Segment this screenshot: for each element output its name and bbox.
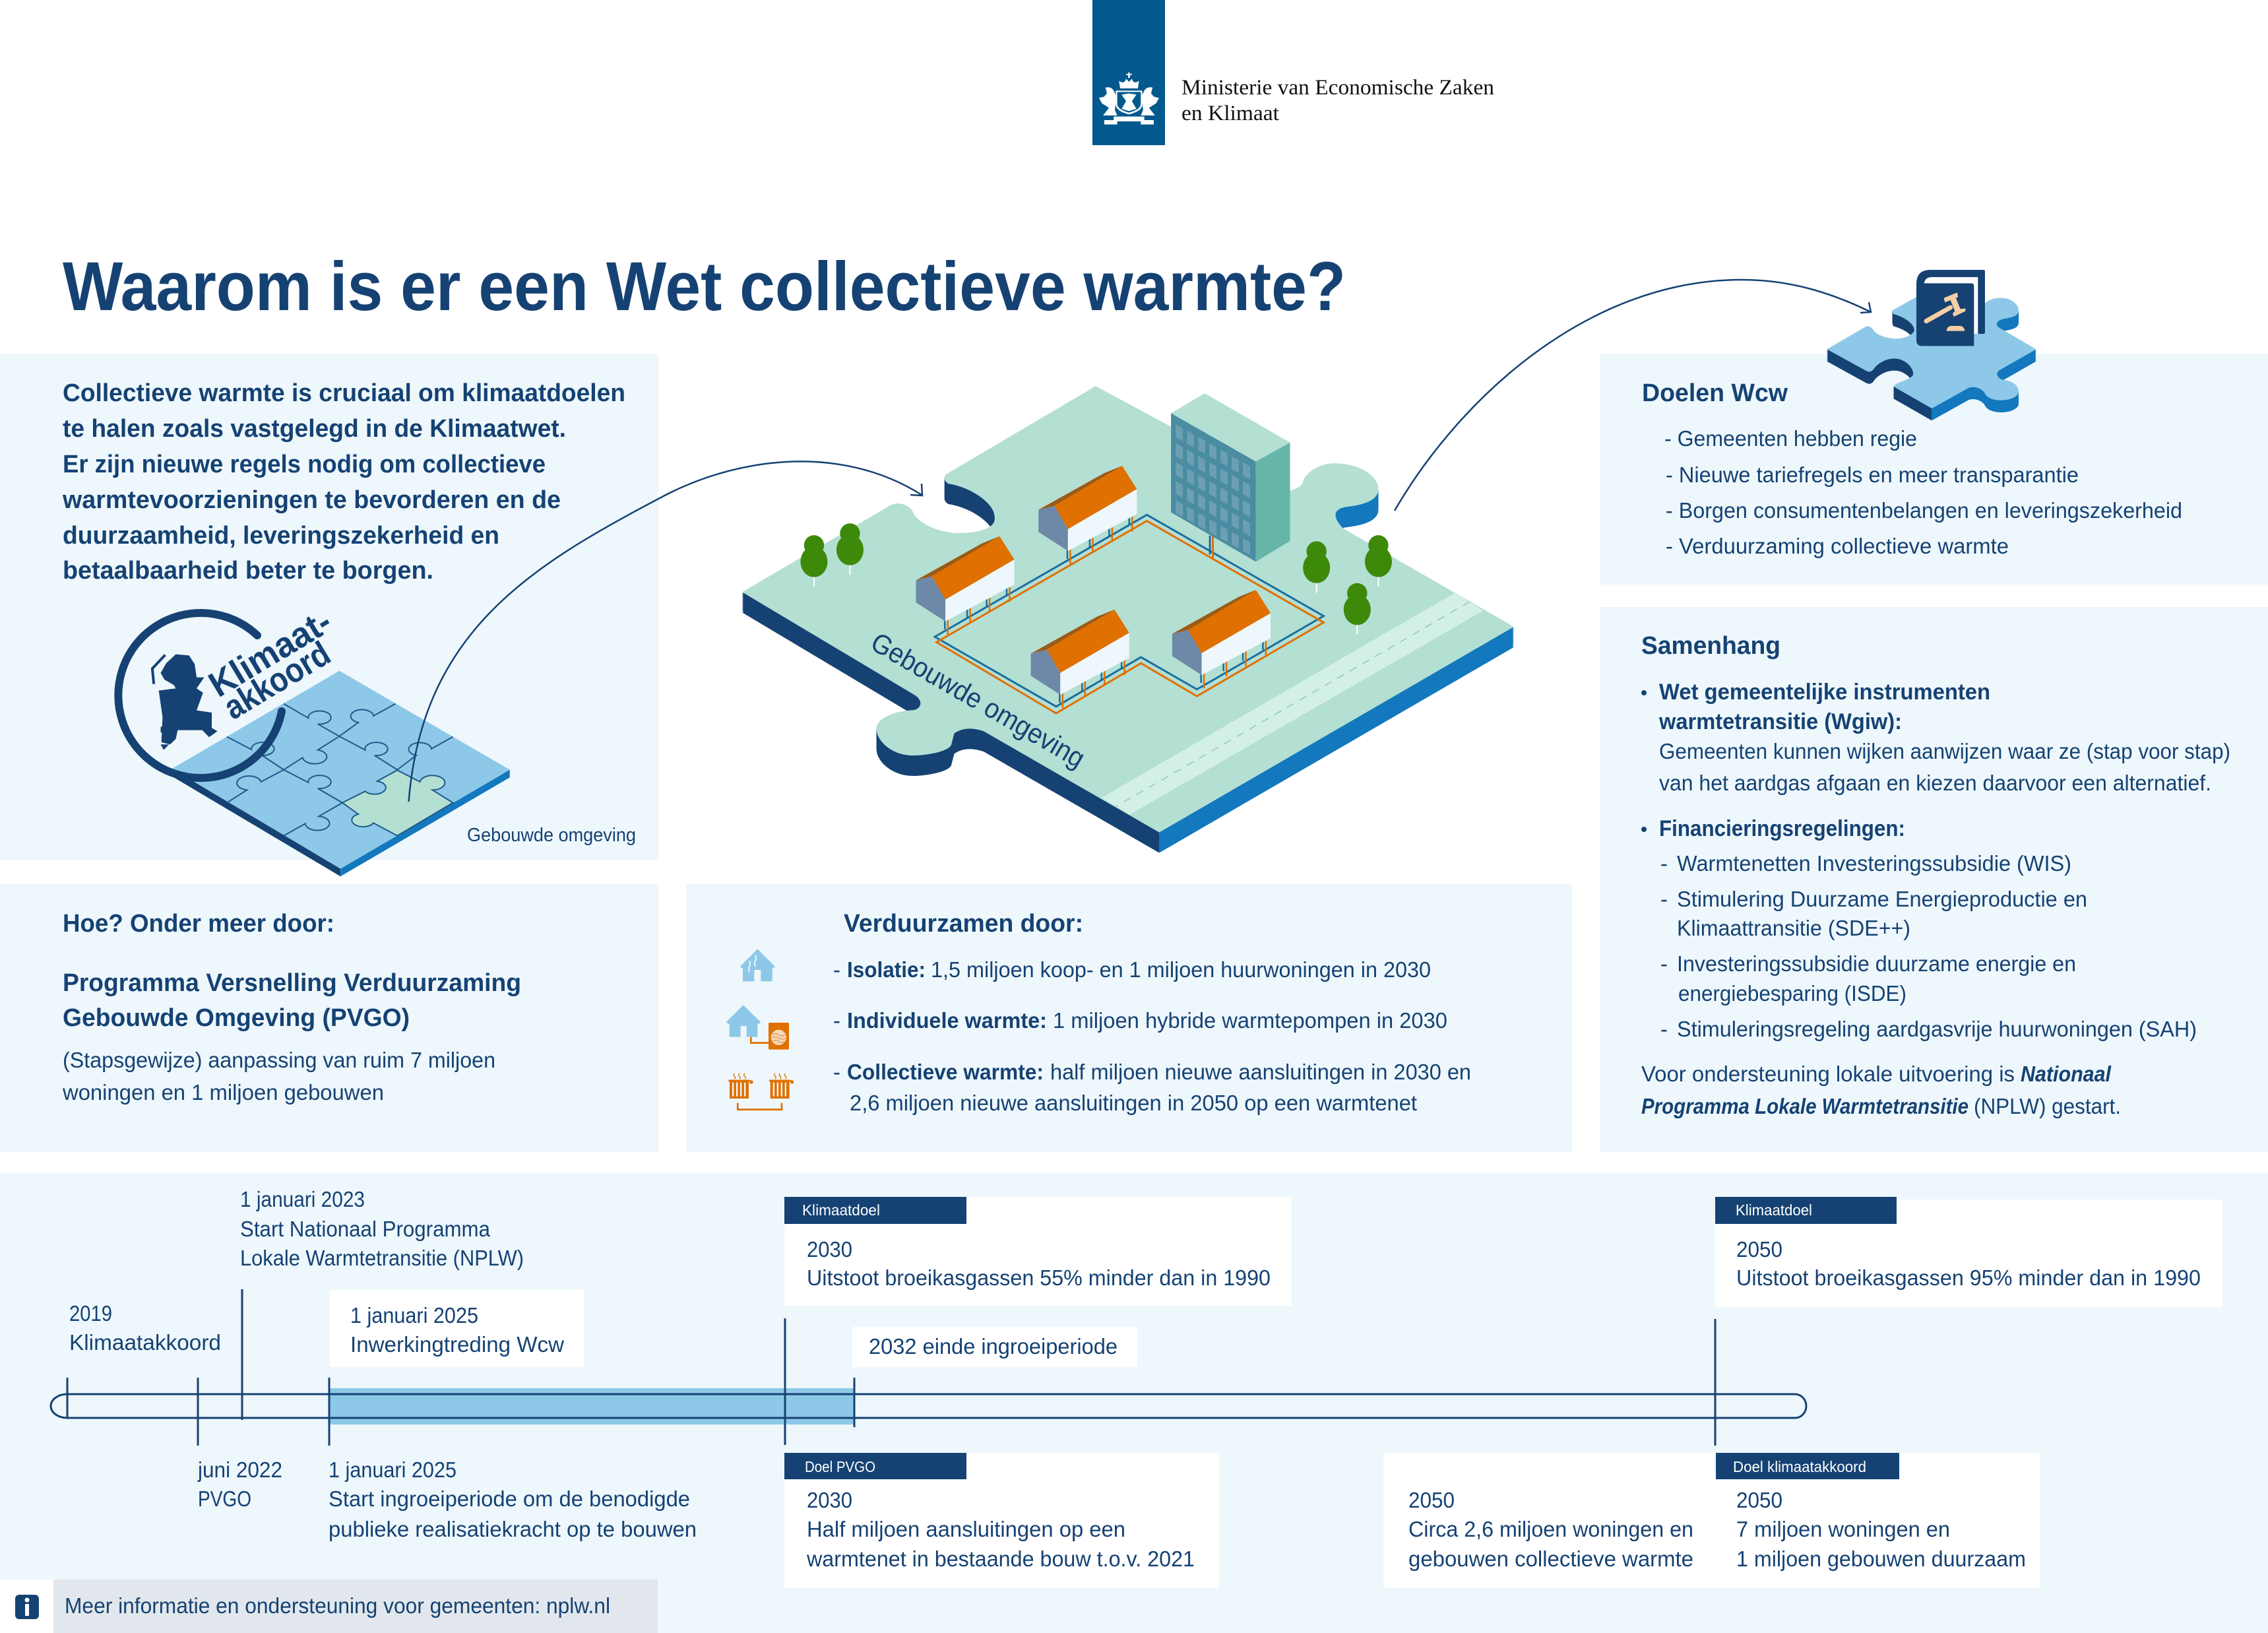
road bbox=[1102, 592, 1483, 815]
bullet: Financieringsregelingen: Financieringsregelingen: bbox=[1659, 816, 1905, 841]
card: Doel PVGO bbox=[784, 1453, 1219, 1588]
icon: coat of arms bbox=[1099, 73, 1159, 125]
panel: Doelen Wcw: - Gemeenten hebben regie bbox=[1664, 426, 1917, 451]
bullet: Financieringsregelingen: Stimulering Duurzame Energieproductie en bbox=[1677, 887, 2087, 911]
milestone: 2025 start ingroeiperiode bbox=[329, 1457, 697, 1541]
label: Gebouwde omgeving (small): Gebouwde omgeving bbox=[467, 825, 636, 846]
bullet: Financieringsregelingen bbox=[1641, 816, 2197, 1041]
intro text block: warmtevoorzieningen te bevorderen en de bbox=[62, 486, 561, 514]
Klimaatakkoord logo: akkoord bbox=[217, 634, 337, 727]
intro text block: Er zijn nieuwe regels nodig om collectieve bbox=[63, 451, 546, 478]
panel: Doelen Wcw: - Verduurzaming collectieve warmte bbox=[1666, 534, 2009, 558]
puzzle thickness bbox=[742, 478, 1514, 852]
bullet: Wgiw bbox=[1641, 680, 2230, 795]
green puzzle piece bbox=[342, 770, 453, 836]
milestone: 2023 NPLW: Start Nationaal Programma bbox=[240, 1217, 491, 1241]
item: Individuele warmte bbox=[833, 1008, 1447, 1033]
puzzle thickness bbox=[1827, 298, 2036, 420]
ministry name: en Klimaat bbox=[1181, 102, 1279, 125]
note: NPLW: Programma Lokale Warmtetransitie bbox=[1641, 1094, 1969, 1118]
card: Doel klimaatakkoord: Circa 2,6 miljoen woningen en bbox=[1408, 1517, 1693, 1541]
ministry name: Ministerie van Economische Zaken bbox=[1181, 76, 1494, 100]
item: Collectieve warmte: - bbox=[833, 1060, 840, 1084]
milestone: 2023 NPLW bbox=[240, 1187, 524, 1270]
note: NPLW: (NPLW) gestart. bbox=[1974, 1094, 2121, 1118]
note: NPLW: Nationaal bbox=[2021, 1062, 2112, 1086]
trees bbox=[800, 523, 1392, 635]
note: NPLW: Voor ondersteuning lokale uitvoering is bbox=[1641, 1062, 2015, 1086]
panel: Samenhang bbox=[1641, 632, 2230, 1118]
Klimaatakkoord logo: Klimaat- bbox=[202, 601, 338, 705]
panel: Verduurzamen door bbox=[726, 910, 1471, 1115]
panel: Samenhang: Samenhang bbox=[1641, 632, 1780, 660]
milestone: juni 2022 PVGO: PVGO bbox=[198, 1487, 251, 1511]
card: Doel klimaatakkoord bbox=[1383, 1453, 2040, 1588]
title: Waarom is er een Wet collectieve warmte? bbox=[63, 248, 1346, 325]
logo: Rijksoverheid ribbon with crest bbox=[1092, 0, 1494, 145]
item: Isolatie: - bbox=[833, 957, 840, 982]
note: NPLW bbox=[1641, 1062, 2121, 1118]
milestone: 2025 Inwerkingtreding: Inwerkingtreding Wcw bbox=[350, 1332, 564, 1357]
panel: Doelen Wcw: - Borgen consumentenbelangen en leveringszekerheid bbox=[1666, 498, 2182, 523]
item: Collectieve warmte: half miljoen nieuwe aansluitingen in 2030 en bbox=[1050, 1060, 1471, 1084]
milestone: 2025 start ingroeiperiode: 1 januari 2025 bbox=[329, 1457, 457, 1482]
milestone: 2025 start ingroeiperiode: Start ingroeiperiode om de benodigde bbox=[329, 1487, 690, 1511]
milestone: 2019 Klimaatakkoord bbox=[69, 1301, 221, 1355]
bullet: Wgiw: Wet gemeentelijke instrumenten bbox=[1659, 680, 1990, 705]
card: Klimaatdoel 2030: Klimaatdoel bbox=[802, 1201, 880, 1219]
houses bbox=[916, 466, 1271, 708]
card: Doel klimaatakkoord: Doel klimaatakkoord bbox=[1733, 1458, 1866, 1475]
item: Collectieve warmte: 2,6 miljoen nieuwe aansluitingen in 2050 op een warmtenet bbox=[850, 1091, 1417, 1115]
label on puzzle: Gebouwde omgeving: Gebouwde omgeving bbox=[866, 626, 1090, 774]
puzzle seams bbox=[227, 704, 453, 836]
Klimaatakkoord logo bbox=[118, 601, 338, 778]
card: Klimaatdoel 2030: Uitstoot broeikasgassen 55% minder dan in 1990 bbox=[807, 1265, 1271, 1290]
card: 2032 einde ingroeiperiode bbox=[852, 1327, 1137, 1367]
card: Doel klimaatakkoord: 7 miljoen woningen en bbox=[1736, 1517, 1950, 1541]
panel: Hoe? bbox=[62, 910, 521, 1105]
milestone: 2023 NPLW: Lokale Warmtetransitie (NPLW) bbox=[240, 1246, 524, 1270]
panel: Verduurzamen door: Verduurzamen door: bbox=[844, 910, 1083, 938]
bullet: Financieringsregelingen: - bbox=[1660, 851, 1668, 876]
milestone: juni 2022 PVGO bbox=[197, 1457, 282, 1511]
milestone: 2025 Inwerkingtreding: 1 januari 2025 bbox=[350, 1303, 478, 1328]
intro text block bbox=[62, 379, 625, 585]
bullet: Financieringsregelingen: - bbox=[1660, 1017, 1668, 1041]
card: Doel klimaatakkoord: gebouwen collectieve warmte bbox=[1408, 1547, 1693, 1571]
panel: Hoe?: Hoe? Onder meer door: bbox=[63, 910, 334, 938]
tower bbox=[1171, 393, 1290, 561]
background panels bbox=[0, 354, 2268, 1633]
intro text block: Collectieve warmte is cruciaal om klimaatdoelen bbox=[63, 379, 625, 407]
card: Klimaatdoel 2030 bbox=[784, 1197, 1292, 1306]
milestone: 2019 Klimaatakkoord: Klimaatakkoord bbox=[69, 1330, 221, 1355]
card: Klimaatdoel 2050: Klimaatdoel bbox=[1736, 1201, 1812, 1219]
item: Isolatie: Isolatie: bbox=[847, 957, 926, 982]
puzzle surface bbox=[1827, 297, 2036, 408]
bullet: Financieringsregelingen: - bbox=[1660, 951, 1668, 976]
panel: Hoe?: (Stapsgewijze) aanpassing van ruim 7 miljoen bbox=[63, 1048, 495, 1072]
panel: Doelen Wcw: Doelen Wcw bbox=[1642, 379, 1788, 407]
card: Klimaatdoel 2050 bbox=[1715, 1197, 2222, 1307]
card: Doel PVGO: Doel PVGO bbox=[805, 1458, 875, 1475]
puzzle surface bbox=[742, 386, 1514, 833]
milestone: 2019 Klimaatakkoord: 2019 bbox=[69, 1301, 112, 1326]
bullet: Wgiw: Gemeenten kunnen wijken aanwijzen waar ze (stap voor stap) bbox=[1659, 739, 2230, 763]
timeline bbox=[51, 1289, 1806, 1446]
heat network pipes bbox=[935, 515, 1323, 713]
milestone: juni 2022 PVGO: juni 2022 bbox=[197, 1457, 282, 1482]
panel: Doelen Wcw bbox=[1642, 379, 2182, 558]
milestone: 2025 start ingroeiperiode: publieke realisatiekracht op te bouwen bbox=[329, 1517, 697, 1541]
main puzzle piece: built environment bbox=[742, 386, 1514, 853]
card: Klimaatdoel 2030: 2030 bbox=[807, 1237, 852, 1262]
item: Individuele warmte: 1 miljoen hybride warmtepompen in 2030 bbox=[1053, 1008, 1447, 1033]
card: Doel PVGO: warmtenet in bestaande bouw t.o.v. 2021 bbox=[806, 1547, 1195, 1571]
card: Doel klimaatakkoord: 1 miljoen gebouwen duurzaam bbox=[1736, 1547, 2026, 1571]
icon: connected radiators bbox=[728, 1073, 794, 1110]
bullet: Wgiw: van het aardgas afgaan en kiezen daarvoor een alternatief. bbox=[1659, 771, 2211, 795]
bullet: Financieringsregelingen: Investeringssubsidie duurzame energie en bbox=[1677, 951, 2076, 976]
card: Klimaatdoel 2050: Uitstoot broeikasgassen 95% minder dan in 1990 bbox=[1736, 1265, 2201, 1290]
card: Doel klimaatakkoord: 2050 bbox=[1408, 1488, 1455, 1512]
bullet: Wgiw: warmtetransitie (Wgiw): bbox=[1658, 709, 1902, 734]
panel: Hoe?: Gebouwde Omgeving (PVGO) bbox=[63, 1004, 410, 1032]
arrow: built environment to Wcw puzzle bbox=[1395, 280, 1871, 511]
icon: insulated house bbox=[740, 949, 775, 981]
card: Klimaatdoel 2050: 2050 bbox=[1736, 1237, 1782, 1262]
panel: Hoe?: woningen en 1 miljoen gebouwen bbox=[62, 1080, 384, 1105]
timeline band: ingroeiperiode bbox=[329, 1388, 854, 1425]
intro text block: betaalbaarheid beter te borgen. bbox=[63, 557, 433, 585]
intro text block: duurzaamheid, leveringszekerheid en bbox=[63, 522, 499, 550]
intro text block: te halen zoals vastgelegd in de Klimaatwet. bbox=[63, 415, 566, 443]
item: Isolatie: 1,5 miljoen koop- en 1 miljoen huurwoningen in 2030 bbox=[931, 957, 1431, 982]
bullet: Financieringsregelingen: Warmtenetten Investeringssubsidie (WIS) bbox=[1677, 851, 2071, 876]
item: Individuele warmte: Individuele warmte: bbox=[847, 1008, 1047, 1033]
item: Collectieve warmte: Collectieve warmte: bbox=[847, 1060, 1044, 1084]
logo ring bbox=[118, 613, 282, 778]
card: Doel PVGO: 2030 bbox=[807, 1488, 852, 1512]
puzzle board: Klimaatakkoord bbox=[172, 671, 510, 876]
ministry name bbox=[1181, 76, 1494, 125]
item: Individuele warmte: - bbox=[833, 1008, 840, 1033]
milestone: 2023 NPLW: 1 januari 2023 bbox=[240, 1187, 365, 1211]
bullet: Financieringsregelingen: - bbox=[1660, 887, 1668, 911]
icon: map of the Netherlands bbox=[152, 655, 218, 750]
icon: info bbox=[15, 1595, 39, 1619]
timeline ticks bbox=[67, 1289, 1715, 1446]
card: 2032 einde ingroeiperiode: 2032 einde ingroeiperiode bbox=[869, 1334, 1118, 1359]
card: Doel klimaatakkoord: 2050 bbox=[1736, 1488, 1782, 1512]
arrow: national puzzle to built environment bbox=[409, 461, 922, 802]
card: Doel PVGO: Half miljoen aansluitingen op een bbox=[807, 1517, 1125, 1541]
timeline bar bbox=[51, 1394, 1806, 1418]
bullet: Financieringsregelingen: Stimuleringsregeling aardgasvrije huurwoningen (SAH) bbox=[1677, 1017, 2197, 1041]
bullet: Financieringsregelingen: Klimaattransitie (SDE++) bbox=[1677, 916, 1910, 940]
item: Collectieve warmte bbox=[833, 1060, 1471, 1115]
footer info bar bbox=[0, 1580, 658, 1633]
icon: law book with gavel bbox=[1916, 270, 1985, 346]
bullet: Financieringsregelingen: energiebesparing (ISDE) bbox=[1678, 981, 1906, 1006]
puzzle piece with law book bbox=[1827, 270, 2036, 420]
panel: Doelen Wcw: - Nieuwe tariefregels en meer transparantie bbox=[1666, 463, 2079, 487]
footer info bar: Meer informatie en ondersteuning voor gemeenten: nplw.nl bbox=[65, 1593, 610, 1618]
icon: house with heat pump bbox=[726, 1005, 789, 1050]
panel: Hoe?: Programma Versnelling Verduurzaming bbox=[63, 969, 521, 997]
milestone: 2025 Inwerkingtreding bbox=[330, 1290, 584, 1367]
